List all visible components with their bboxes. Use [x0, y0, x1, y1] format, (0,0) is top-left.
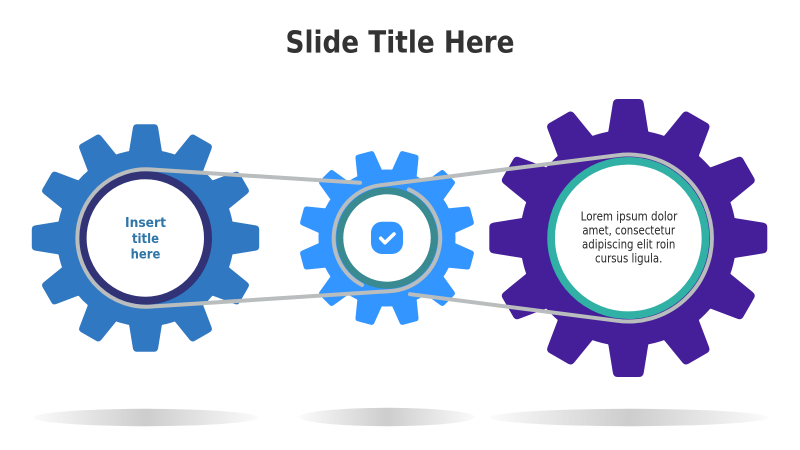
- belt: middle gear to right gear: [334, 155, 712, 322]
- text: insert title here: here: [131, 248, 161, 262]
- belt: left gear to middle gear: [77, 169, 440, 307]
- text: lorem ipsum: Lorem ipsum dolor: [581, 210, 677, 224]
- gear: left: [32, 124, 259, 352]
- gear: right: [489, 99, 767, 377]
- shadow: right gear: [490, 409, 768, 426]
- title: Slide Title Here: [286, 26, 514, 60]
- text: lorem ipsum: amet, consectetur: [582, 224, 675, 238]
- shadow: left gear: [33, 409, 258, 426]
- text: insert title here: title: [132, 232, 159, 247]
- gear: middle: [279, 130, 495, 346]
- text: lorem ipsum: adipiscing elit roin: [582, 238, 675, 252]
- icon: check badge: [371, 222, 403, 254]
- text: insert title here: Insert: [125, 216, 166, 231]
- shadow: middle gear: [299, 408, 475, 426]
- text: lorem ipsum: [581, 210, 677, 266]
- text: lorem ipsum: cursus ligula.: [595, 252, 662, 266]
- text: insert title here: [125, 216, 166, 262]
